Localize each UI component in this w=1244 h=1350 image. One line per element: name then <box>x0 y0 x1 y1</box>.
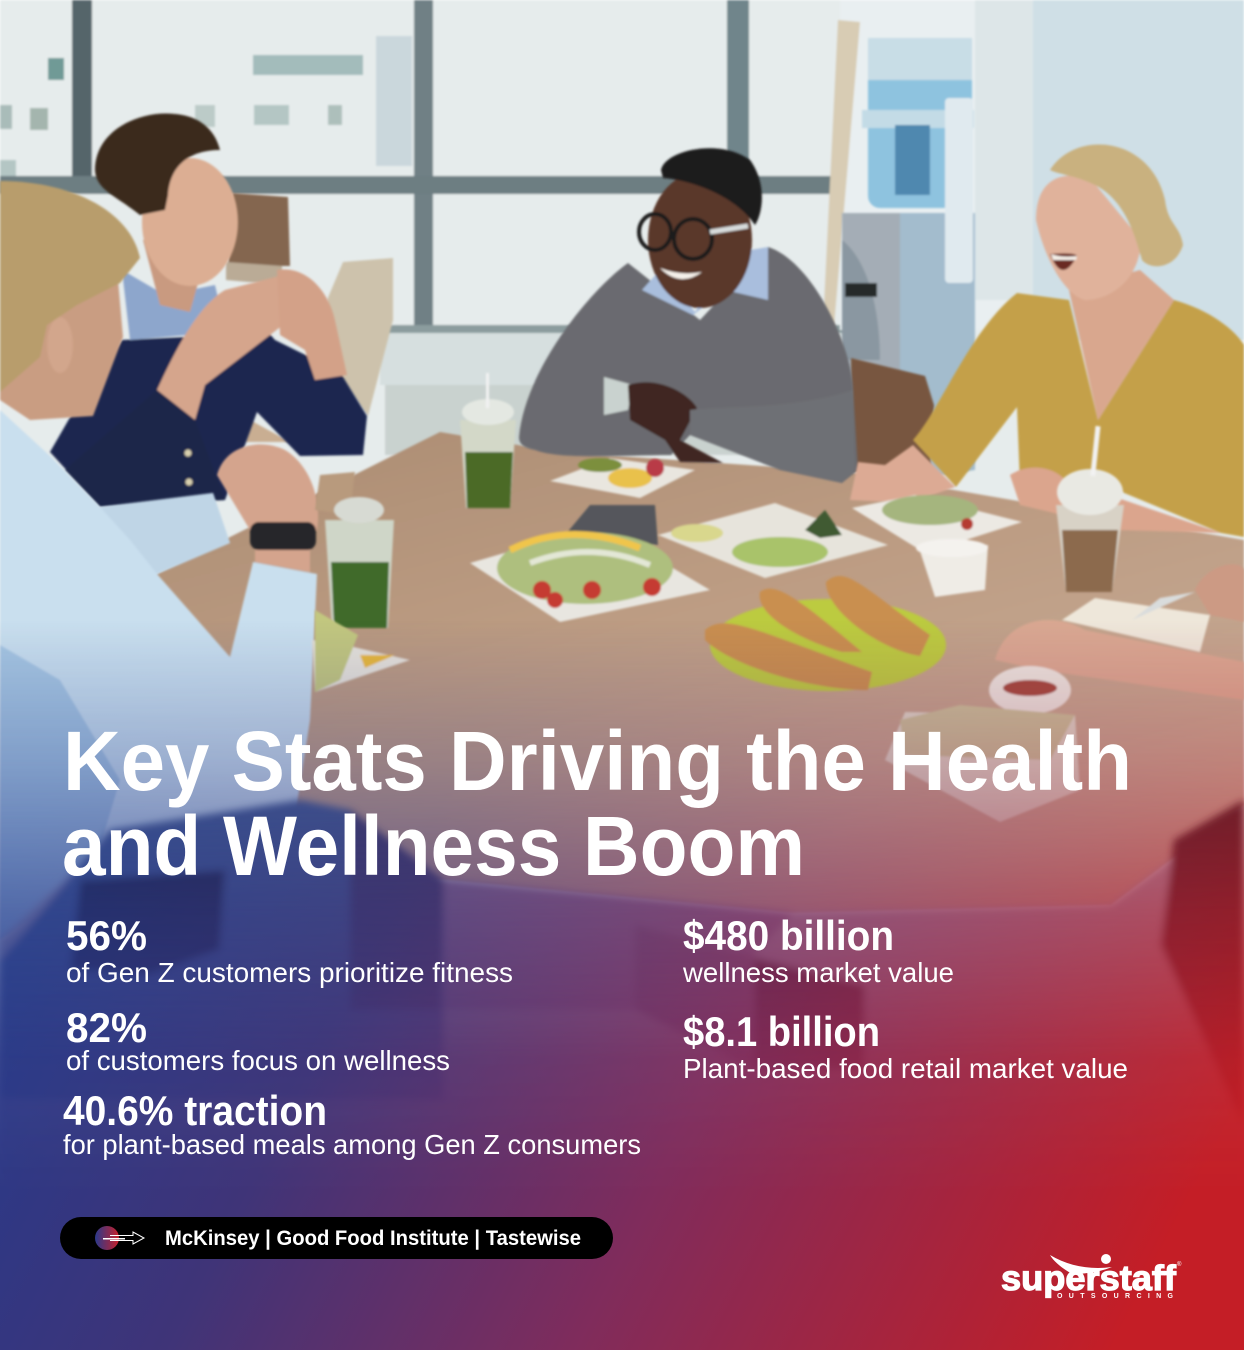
stat: 56% Gen Z fitness <box>66 912 513 988</box>
stat: $480 billion: $480 billion <box>683 912 894 959</box>
source pill <box>60 1217 613 1259</box>
person in navy sweater <box>50 113 367 507</box>
stat: $8.1 billion: Plant-based food retail market value <box>683 1053 1128 1084</box>
wooden table <box>148 432 1244 913</box>
logo: superstaff outsourcing: superstaff <box>1001 1259 1176 1298</box>
plates of salad and food <box>312 458 1244 822</box>
title: and Wellness Boom <box>62 799 805 893</box>
logo: superstaff outsourcing: ® <box>1177 1261 1182 1268</box>
stat: 40.6% plant-based traction: 40.6% traction <box>63 1087 327 1134</box>
chairs <box>226 193 934 472</box>
logo: superstaff outsourcing: OUTSOURCING <box>1057 1293 1174 1300</box>
glasses <box>639 214 748 259</box>
stat: 56% Gen Z fitness: 56% <box>66 912 147 959</box>
water cooler <box>842 38 975 480</box>
blond man seen from behind in light blue shirt <box>0 181 318 940</box>
stat: 82% wellness focus: of customers focus on wellness <box>66 1045 450 1076</box>
drinks on the table <box>315 373 1124 628</box>
stat: 40.6% plant-based traction: for plant-based meals among Gen Z consumers <box>63 1129 641 1160</box>
source pill: McKinsey | Good Food Institute | Tastewise <box>165 1227 581 1250</box>
blurred floor and table legs below the table <box>0 800 1244 1350</box>
stat: 56% Gen Z fitness: of Gen Z customers prioritize fitness <box>66 957 513 988</box>
stat: $480 billion <box>682 912 954 988</box>
stat: $8.1 billion: $8.1 billion <box>683 1008 880 1055</box>
title <box>62 714 1132 893</box>
laughing woman in mustard blouse <box>850 145 1244 537</box>
person in gray sweater with glasses <box>519 148 858 483</box>
stat: $8.1 billion <box>683 1008 1128 1084</box>
blue-to-red gradient overlay <box>0 620 1244 1350</box>
stat: $480 billion: wellness market value <box>682 957 954 988</box>
icon: source arrow <box>95 1226 144 1250</box>
title: Key Stats Driving the Health <box>63 714 1132 808</box>
stat: 82% wellness focus <box>66 1004 450 1076</box>
stat: 82% wellness focus: 82% <box>66 1004 147 1051</box>
stat: 40.6% plant-based traction <box>63 1087 641 1160</box>
